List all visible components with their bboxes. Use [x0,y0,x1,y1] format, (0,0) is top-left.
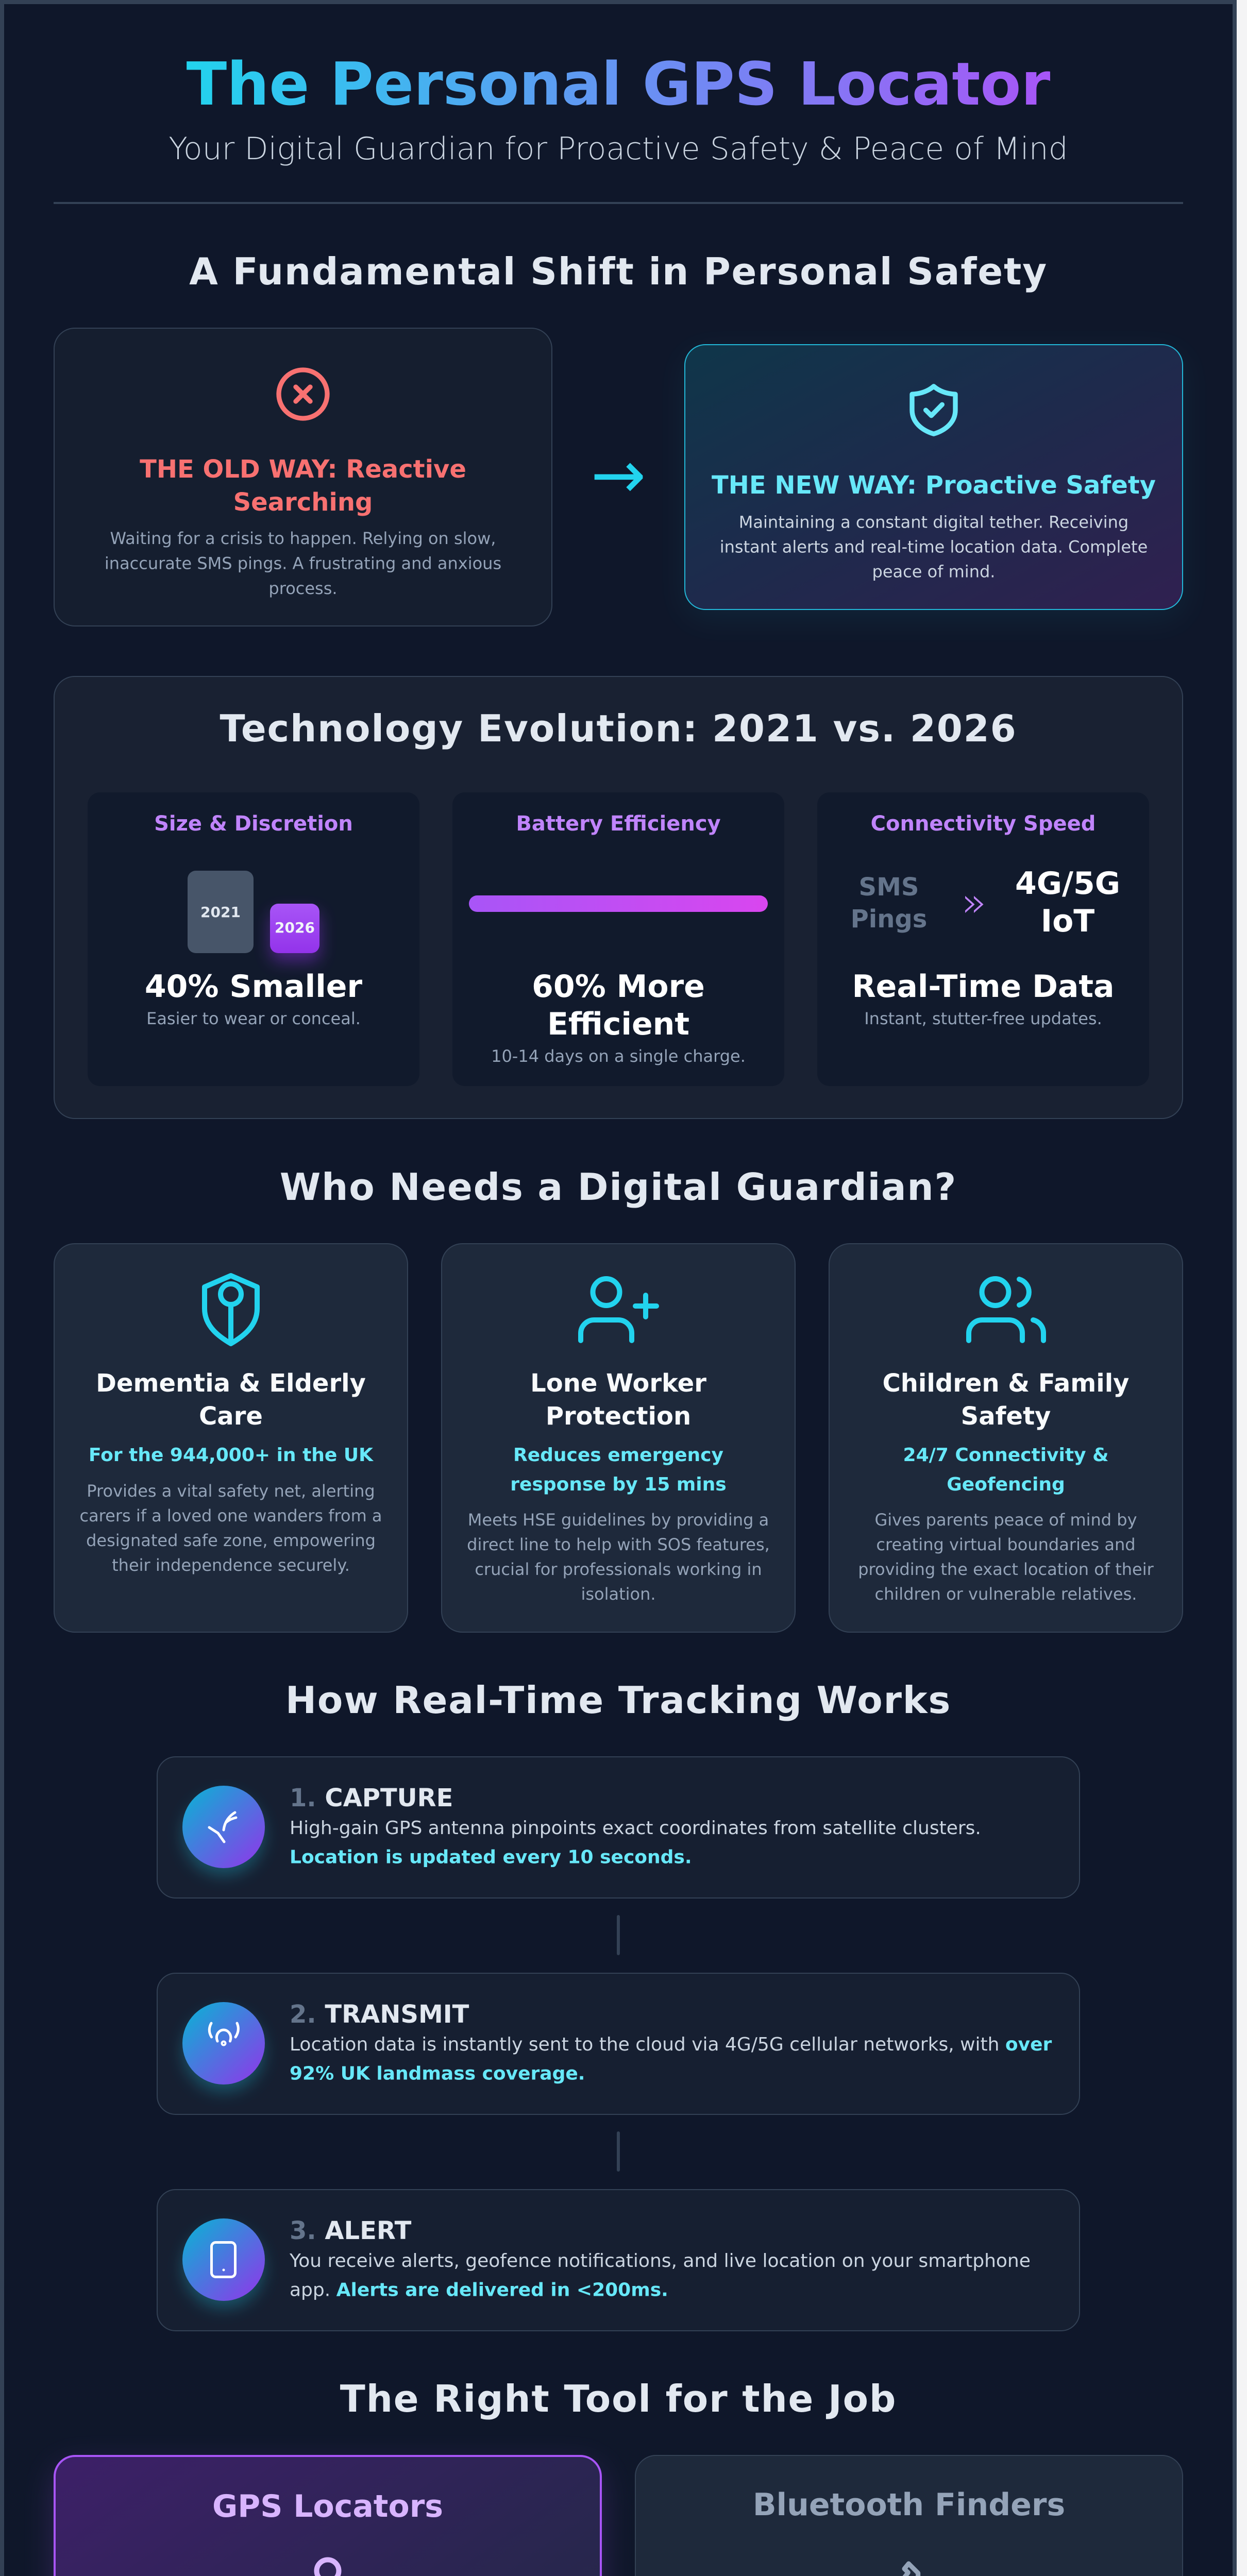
panel: the new way [685,345,1183,618]
sms pings label: SMS [859,873,919,902]
icon: bluetooth tag [881,2564,937,2576]
caption: 10-14 days on a single charge. [491,1046,746,1066]
card: size and discretion [88,792,419,1086]
step text: Location is updated every 10 seconds. [290,1846,692,1868]
audience title: Care [199,1402,263,1431]
panel: the old way [54,328,552,626]
audience description: designated safe zone, empowering [86,1531,376,1550]
sms pings label: Pings [851,905,927,934]
step text: You receive alerts, geofence notifications, and live location on your smartphone [289,2250,1031,2272]
audience stat: Geofencing [947,1474,1065,1495]
icon: smartphone [182,2218,265,2301]
step 3: alert [157,2190,1080,2331]
icon: person [305,2560,351,2576]
audience title: Lone Worker [530,1369,706,1398]
icon: satellite antenna [182,1786,265,1868]
connector [617,1915,620,1955]
audience description: their independence securely. [112,1555,350,1575]
icon: shield pin [205,1276,257,1344]
step text: app. Alerts are delivered in <200ms. [290,2279,668,2301]
audience description: crucial for professionals working in [475,1560,762,1579]
new way title: THE NEW WAY: Proactive Safety [712,471,1156,500]
stat: 40% smaller: 40% Smaller [145,969,362,1005]
heading: how tracking works: How Real-Time Tracking Works [285,1679,951,1722]
step 1: capture [157,1757,1080,1898]
icon: user plus [581,1279,656,1341]
double chevron: » [962,878,986,926]
new way description: peace of mind. [872,562,995,581]
card: children and family safety [829,1244,1183,1632]
icon: shield check [912,386,955,434]
audience description: isolation. [581,1584,656,1604]
old way title: Searching [233,488,373,517]
new way description: instant alerts and real-time location data. Complete [720,537,1148,556]
audience description: providing the exact location of their [858,1560,1154,1579]
caption: Easier to wear or conceal. [146,1009,361,1028]
step title: 1. CAPTURE [290,1784,453,1812]
audience title: Dementia & Elderly [96,1369,366,1398]
old way description: Waiting for a crisis to happen. Relying on slow, [110,529,496,548]
stat: 60% more efficient: 60% More [532,969,705,1005]
audience description: Gives parents peace of mind by [874,1510,1137,1530]
audience title: Safety [961,1402,1051,1431]
audience title: Children & Family [883,1369,1129,1398]
4g/5g iot label: 4G/5G [1015,866,1120,902]
card: dementia and elderly care [54,1244,408,1632]
old way title: THE OLD WAY: Reactive [140,455,466,484]
audience stat: Reduces emergency [513,1445,723,1466]
card: battery efficiency [452,792,784,1086]
audience description: carers if a loved one wanders from a [79,1506,382,1526]
icon: signal [182,2002,265,2084]
panel title: GPS Locators [212,2488,443,2524]
4g/5g iot label: IoT [1041,903,1094,939]
audience description: Meets HSE guidelines by providing a [468,1510,769,1530]
card heading: Size & Discretion [154,812,353,836]
step 2: transmit [157,1973,1080,2114]
caption: Instant, stutter-free updates. [864,1009,1102,1028]
panel title: Bluetooth Finders [753,2487,1065,2523]
title: The Personal GPS Locator [187,50,1051,119]
card heading: Battery Efficiency [516,812,721,836]
step text: High-gain GPS antenna pinpoints exact coordinates from satellite clusters. [290,1818,981,1839]
step title: 3. ALERT [290,2216,412,2245]
icon: users [969,1279,1043,1341]
heading: technology evolution: Technology Evolution: 2021 vs. 2026 [220,707,1017,750]
audience description: creating virtual boundaries and [876,1535,1136,1554]
icon: x circle [279,370,327,418]
panel: gps locators [54,2456,602,2576]
audience description: Provides a vital safety net, alerting [87,1481,375,1501]
old way description: inaccurate SMS pings. A frustrating and anxious [105,553,501,573]
heading: fundamental shift: A Fundamental Shift in Personal Safety [189,250,1048,293]
audience stat: 24/7 Connectivity & [903,1445,1108,1466]
card: lone worker protection [442,1244,795,1632]
heading: who needs: Who Needs a Digital Guardian? [280,1165,957,1209]
audience stat: For the 944,000+ in the UK [89,1445,374,1466]
stat: real-time data: Real-Time Data [852,969,1115,1005]
stat: 60% more efficient: Efficient [547,1006,689,1042]
device comparison bars [188,871,320,961]
connector [617,2131,620,2172]
arrow: → [591,437,646,514]
audience stat: response by 15 mins [510,1474,727,1495]
step text: 92% UK landmass coverage. [290,2063,585,2084]
battery bar [469,895,768,912]
device comparison bars: 2021 [200,904,241,921]
old way description: process. [268,579,338,598]
card heading: Connectivity Speed [871,812,1096,836]
new way description: Maintaining a constant digital tether. Receiving [739,512,1128,532]
audience title: Protection [546,1402,691,1431]
device comparison bars: 2026 [275,919,315,936]
audience description: children or vulnerable relatives. [875,1584,1137,1604]
panel: technology evolution [54,676,1183,1118]
step text: Location data is instantly sent to the cloud via 4G/5G cellular networks, with over [290,2034,1052,2055]
panel: bluetooth finders [635,2455,1183,2576]
audience description: direct line to help with SOS features, [467,1535,770,1554]
subtitle: Your Digital Guardian for Proactive Safety & Peace of Mind [168,131,1068,167]
card: connectivity speed [817,792,1149,1086]
header [54,50,1183,204]
step title: 2. TRANSMIT [290,2000,469,2029]
heading: right tool: The Right Tool for the Job [340,2377,897,2420]
